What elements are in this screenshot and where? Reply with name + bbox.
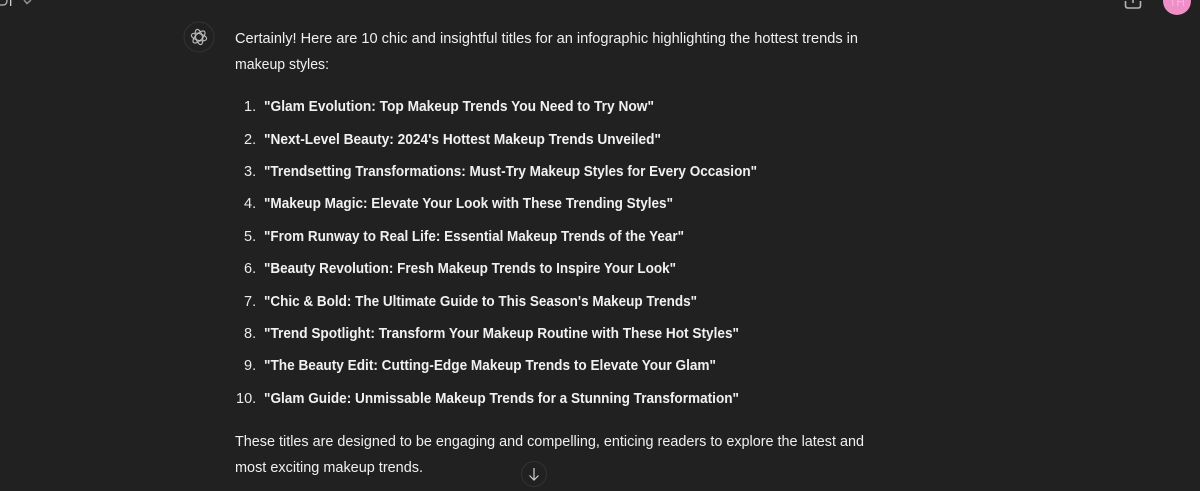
item 2: "Next-Level Beauty: 2024's Hottest Makeup Trends Unveiled": [264, 132, 661, 148]
top-left model selector remnant: [0, 0, 31, 6]
item 5: "From Runway to Real Life: Essential Makeup Trends of the Year": [264, 229, 684, 245]
item 3: "Trendsetting Transformations: Must-Try Makeup Styles for Every Occasion": [264, 164, 757, 180]
item 9: 9.: [244, 358, 256, 374]
item 6: 6.: [244, 261, 256, 277]
closing text: most exciting makeup trends.: [235, 460, 423, 476]
item 8: "Trend Spotlight: Transform Your Makeup Routine with These Hot Styles": [264, 326, 739, 342]
item 6: "Beauty Revolution: Fresh Makeup Trends to Inspire Your Look": [264, 261, 676, 277]
icon: scroll down arrow: [522, 462, 546, 486]
icon: assistant logo: [184, 22, 214, 52]
icon: user avatar: [1163, 0, 1191, 15]
item 7: "Chic & Bold: The Ultimate Guide to This Season's Makeup Trends": [264, 294, 697, 310]
intro text: [235, 31, 858, 73]
item 7: 7.: [244, 294, 256, 310]
item 8: 8.: [244, 326, 256, 342]
item 9: "The Beauty Edit: Cutting-Edge Makeup Trends to Elevate Your Glam": [264, 358, 716, 374]
item 1: 1.: [244, 99, 256, 115]
closing text: These titles are designed to be engaging and compelling, enticing readers to explore the latest and: [235, 434, 864, 450]
numbered list of titles: [236, 99, 757, 407]
item 1: "Glam Evolution: Top Makeup Trends You Need to Try Now": [264, 99, 654, 115]
item 10: "Glam Guide: Unmissable Makeup Trends for a Stunning Transformation": [264, 391, 739, 407]
icon: share: [1126, 0, 1140, 8]
item 3: 3.: [244, 164, 256, 180]
item 10: 10.: [236, 391, 256, 407]
item 4: 4.: [244, 196, 256, 212]
intro text: Certainly! Here are 10 chic and insightful titles for an infographic highlighting the hottest trends in: [235, 31, 858, 47]
intro text: makeup styles:: [235, 57, 329, 73]
item 4: "Makeup Magic: Elevate Your Look with These Trending Styles": [264, 196, 673, 212]
item 2: 2.: [244, 132, 256, 148]
closing text: [235, 434, 864, 476]
item 5: 5.: [244, 229, 256, 245]
